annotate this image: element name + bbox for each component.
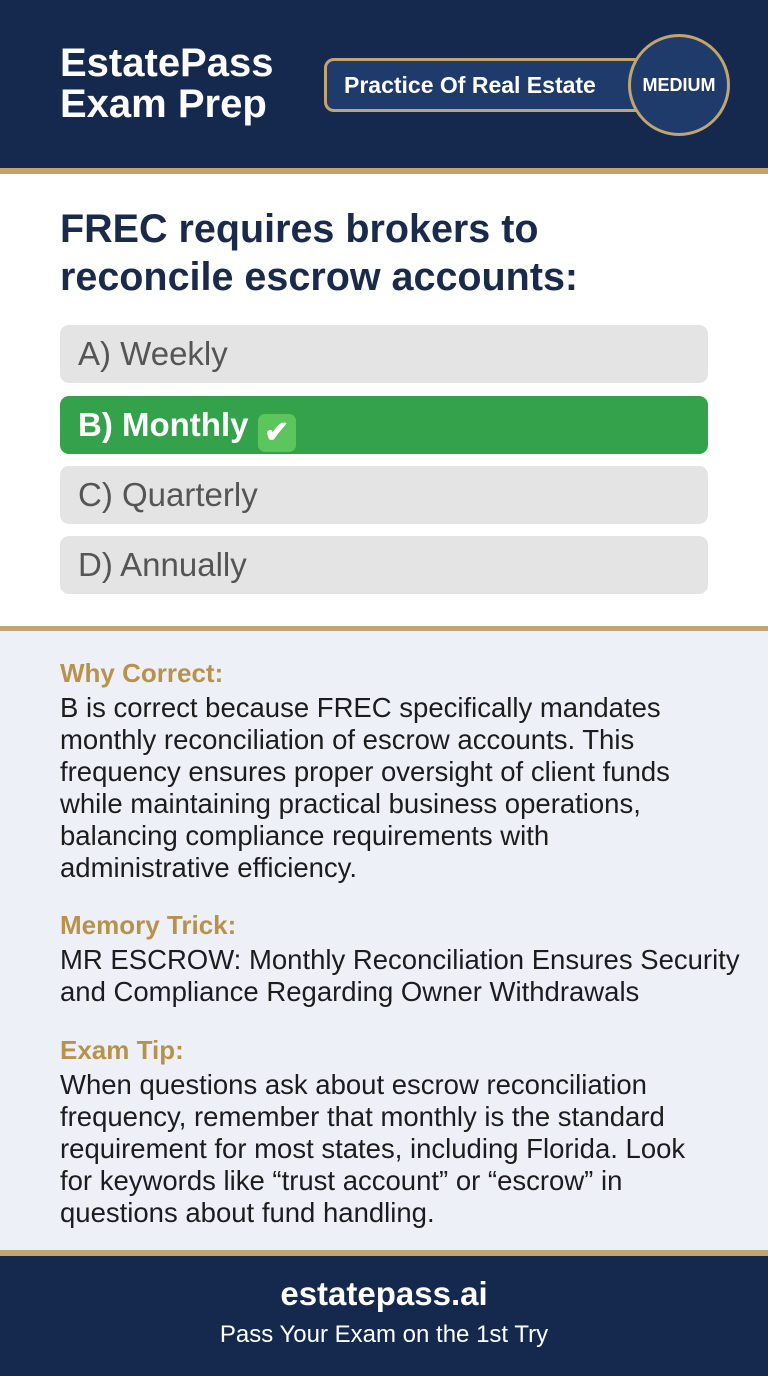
title (60, 41, 273, 126)
option C: C) Quarterly (78, 476, 258, 513)
exam tip text: questions about fund handling. (60, 1197, 435, 1228)
why correct heading: Why Correct: (60, 658, 223, 688)
footer tagline: Pass Your Exam on the 1st Try (220, 1321, 548, 1348)
footer site: estatepass.ai (280, 1275, 488, 1312)
why correct text (60, 692, 670, 883)
why correct text: frequency ensures proper oversight of client funds (60, 756, 670, 787)
question (60, 207, 578, 299)
header (0, 0, 768, 168)
option B correct: B) Monthly (78, 406, 248, 443)
exam tip text (60, 1069, 686, 1228)
category pill (324, 58, 654, 112)
memory trick text: and Compliance Regarding Owner Withdrawals (60, 976, 639, 1007)
option A: A) Weekly (78, 335, 228, 372)
option D (60, 536, 708, 594)
why correct text: administrative efficiency. (60, 852, 357, 883)
why correct text: monthly reconciliation of escrow accounts. This (60, 724, 634, 755)
option B correct (60, 396, 708, 454)
why correct text: B is correct because FREC specifically mandates (60, 692, 661, 723)
title: EstatePass (60, 41, 273, 85)
exam tip text: for keywords like “trust account” or “escrow” in (60, 1165, 622, 1196)
memory trick text: MR ESCROW: Monthly Reconciliation Ensures Security (60, 944, 740, 975)
difficulty badge (628, 34, 730, 136)
exam tip text: frequency, remember that monthly is the standard (60, 1101, 665, 1132)
exam tip text: When questions ask about escrow reconciliation (60, 1069, 647, 1100)
memory trick text (60, 944, 740, 1007)
why correct text: balancing compliance requirements with (60, 820, 549, 851)
memory trick heading: Memory Trick: (60, 910, 236, 940)
question: reconcile escrow accounts: (60, 255, 578, 299)
title: Exam Prep (60, 82, 267, 126)
exam tip heading: Exam Tip: (60, 1035, 184, 1065)
explanation panel (0, 631, 768, 1250)
question: FREC requires brokers to (60, 207, 539, 251)
option B correct: ✔ (264, 416, 289, 449)
option D: D) Annually (78, 546, 247, 583)
option C (60, 466, 708, 524)
footer (0, 1256, 768, 1376)
exam tip text: requirement for most states, including Florida. Look (60, 1133, 685, 1164)
option A (60, 325, 708, 383)
difficulty badge: MEDIUM (642, 75, 716, 95)
why correct text: while maintaining practical business operations, (60, 788, 641, 819)
category pill: Practice Of Real Estate (344, 72, 596, 98)
